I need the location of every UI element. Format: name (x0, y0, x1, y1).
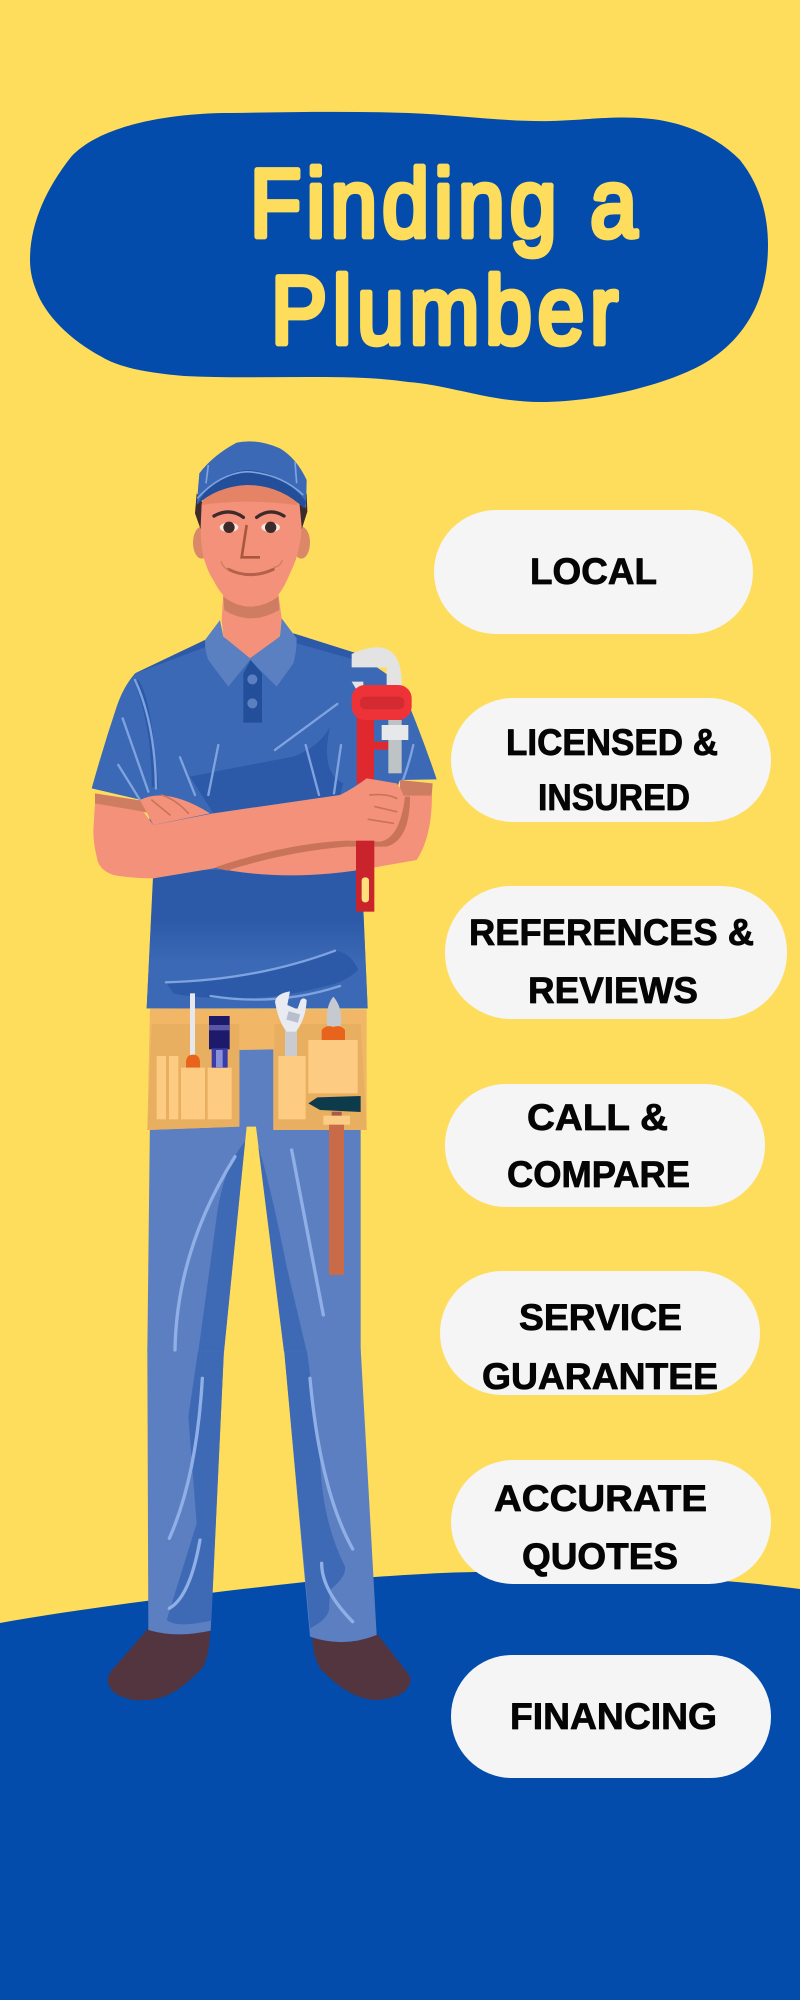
belt, tools and upper trousers (147, 991, 367, 1351)
pill: references and reviews: REVIEWS (528, 970, 698, 1011)
pill: references and reviews: REFERENCES & (469, 912, 754, 953)
pill: licensed and insured: LICENSED & (506, 722, 718, 763)
neck (222, 593, 282, 658)
upper leg creases (175, 1150, 323, 1350)
forehead shadow (202, 480, 300, 505)
title text (250, 150, 638, 365)
upper leg shading (198, 1142, 307, 1351)
shirt shading (133, 633, 362, 813)
finger lines (152, 795, 397, 823)
left hand (140, 796, 210, 825)
cap brim (197, 470, 306, 508)
pill: accurate quotes: ACCURATE (494, 1478, 707, 1519)
pill: accurate quotes: QUOTES (522, 1536, 678, 1577)
ears (193, 527, 310, 559)
shirt (92, 633, 437, 1008)
collar (205, 618, 297, 687)
icon: hammer (308, 1096, 361, 1275)
wrench handle (356, 841, 374, 912)
wrench upper jaw (352, 647, 402, 687)
title banner (30, 112, 768, 402)
pill: licensed and insured: INSURED (538, 777, 690, 818)
title line 2: Plumber (271, 257, 618, 365)
plumber illustration (92, 441, 437, 1700)
lower legs (147, 1349, 377, 1642)
mouth (228, 569, 273, 575)
tool belt (147, 1008, 367, 1130)
belt pockets shading (147, 1024, 367, 1130)
shirt buttons (247, 674, 257, 708)
eyes (220, 522, 280, 533)
pill: local (434, 510, 753, 634)
eyebrows (214, 512, 284, 517)
face (201, 485, 302, 603)
icon: pliers (322, 997, 345, 1041)
icon: flashlight (209, 1016, 230, 1068)
hair (195, 493, 307, 529)
shirt creases (118, 680, 413, 1000)
pill: service guarantee: SERVICE (519, 1297, 682, 1338)
pill: call and compare: CALL & (527, 1097, 668, 1138)
cap crown (197, 441, 307, 508)
lower shirt fold (166, 951, 358, 998)
upper trousers (147, 1043, 361, 1351)
wrench body (352, 682, 412, 783)
cap seams (197, 462, 303, 498)
shoes (108, 1628, 410, 1700)
pill: references and reviews (445, 886, 787, 1019)
sleeve cuffs (95, 780, 433, 813)
pill: service guarantee: GUARANTEE (482, 1356, 718, 1397)
belt pocket panels (157, 1040, 358, 1119)
blue ground wave (0, 1572, 800, 2000)
nose (242, 525, 260, 557)
title line 1: Finding a (250, 150, 638, 258)
cap (197, 441, 307, 508)
pill: accurate quotes (451, 1460, 771, 1584)
pill: local: LOCAL (530, 551, 657, 592)
icon: screwdriver (186, 993, 200, 1068)
pill: call and compare: COMPARE (507, 1154, 690, 1195)
pill: financing: FINANCING (510, 1696, 717, 1737)
leg creases (169, 1378, 353, 1622)
pill: licensed and insured (451, 698, 771, 822)
smile lines (221, 561, 282, 570)
pill: financing (451, 1655, 771, 1778)
trousers and shoes (108, 1349, 410, 1700)
pill: call and compare (445, 1084, 765, 1207)
lower shirt (147, 870, 368, 1008)
neck shadow (223, 597, 279, 618)
right upper arm (213, 793, 432, 875)
title blob (30, 112, 768, 402)
placket (243, 660, 262, 723)
icon: spanner (275, 991, 307, 1057)
leg shading (167, 1349, 345, 1628)
pill: service guarantee (440, 1271, 760, 1397)
crossed forearms (93, 778, 405, 878)
arm shadow (215, 797, 410, 871)
torso and arms (92, 441, 437, 1008)
